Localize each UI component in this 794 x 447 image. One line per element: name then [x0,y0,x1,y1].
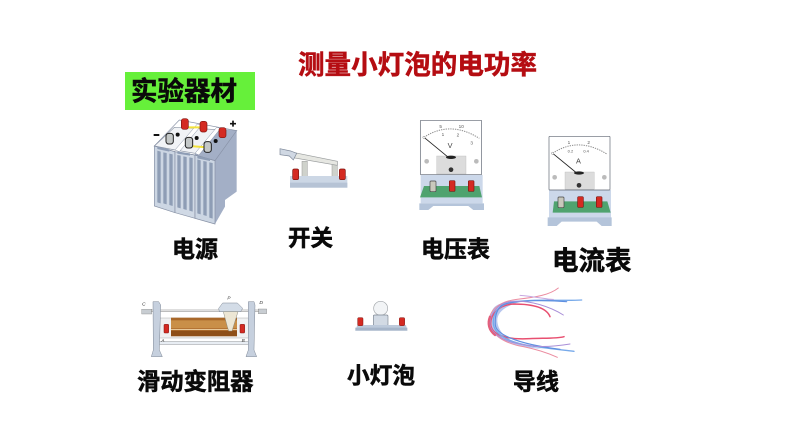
icon: sliding rheostat: B [242,338,245,343]
icon: knife switch [280,149,347,188]
heading: equipment tag [125,72,255,110]
heading: equipment tag: 实验器材 [131,76,237,106]
icon: ammeter: 2 [587,140,590,145]
icon: ammeter: 1 [568,140,571,145]
icon: ammeter: A [576,156,581,165]
icon: voltmeter: 1 [442,132,445,137]
icon: sliding rheostat: P [227,295,231,300]
icon: voltmeter: 3 [470,141,473,146]
label: small bulb: 小灯泡 [347,362,415,388]
icon: sliding rheostat [142,295,267,357]
icon: sliding rheostat: C [142,302,146,308]
label: voltmeter: 电压表 [421,236,490,262]
label: switch: 开关 [288,226,334,251]
title: 测量小灯泡的电功率 [298,50,537,80]
icon: ammeter: 0.4 [583,149,590,154]
label: power source: 电源 [172,236,218,262]
icon: small bulb on base [355,301,407,331]
label: ammeter: 电流表 [552,246,632,276]
icon: voltmeter: V [448,141,453,150]
icon: voltmeter: 5 [439,124,442,129]
label: rheostat: 滑动变阻器 [137,368,253,394]
label: wires: 导线 [513,368,559,394]
icon: sliding rheostat: D [259,300,263,306]
icon: ammeter [548,136,612,226]
icon: voltmeter: 2 [457,133,460,138]
icon: sliding rheostat: A [160,338,164,343]
icon: ammeter: 0.2 [568,149,574,154]
icon: battery [154,119,237,224]
icon: connecting wires [489,288,582,357]
icon: voltmeter: 10 [459,124,464,129]
icon: voltmeter [419,120,484,210]
